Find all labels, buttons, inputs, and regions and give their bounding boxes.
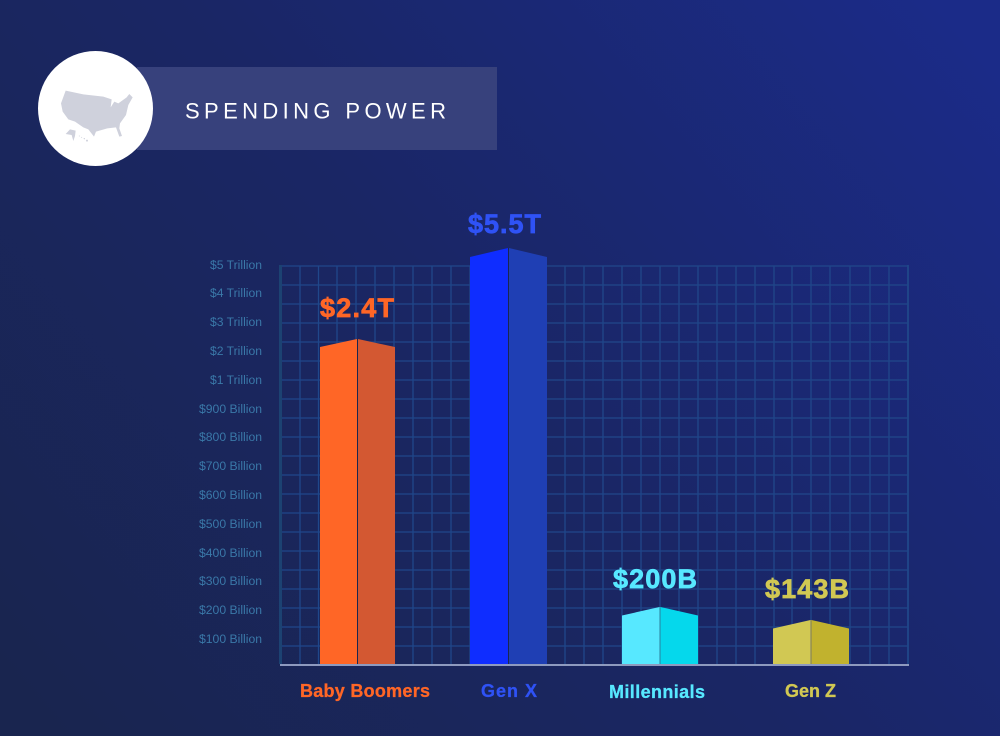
y axis labels: $500 Billion: [199, 519, 262, 531]
y axis labels: $400 Billion: [199, 548, 262, 560]
y axis labels: $3 Trillion: [210, 317, 262, 329]
y axis labels: $4 Trillion: [210, 288, 262, 300]
bar: Gen X: [470, 248, 547, 664]
header: spending power: [38, 51, 497, 166]
y axis labels: $800 Billion: [199, 432, 262, 444]
y axis labels: $100 Billion: [199, 634, 262, 646]
chart baseline: [280, 664, 909, 666]
y axis labels: $200 Billion: [199, 605, 262, 617]
header circle: [38, 51, 153, 166]
value: Baby Boomers: $2.4T: [320, 293, 394, 323]
header banner: [137, 67, 497, 150]
chart grid: [280, 265, 908, 664]
bar: Gen Z: [773, 620, 849, 664]
category: Baby Boomers: Baby Boomers: [300, 681, 430, 701]
category: Gen X: Gen X: [481, 681, 537, 701]
y axis labels: $1 Trillion: [210, 375, 262, 387]
category: Millennials: Millennials: [609, 682, 705, 702]
y axis labels: $700 Billion: [199, 461, 262, 473]
y axis labels: $2 Trillion: [210, 346, 262, 358]
value: Gen Z: $143B: [765, 574, 849, 604]
y axis labels: [199, 260, 262, 646]
value: Millennials: $200B: [613, 564, 697, 594]
bar: Baby Boomers: [320, 339, 395, 664]
bar: Millennials: [622, 607, 698, 664]
y axis labels: $900 Billion: [199, 404, 262, 416]
y axis labels: $600 Billion: [199, 490, 262, 502]
y axis labels: $5 Trillion: [210, 260, 262, 272]
icon: map of the United States: [61, 91, 133, 142]
value: Gen X: $5.5T: [468, 209, 542, 239]
category: Gen Z: Gen Z: [785, 681, 836, 701]
header title: SPENDING POWER: [185, 98, 446, 124]
y axis labels: $300 Billion: [199, 576, 262, 588]
